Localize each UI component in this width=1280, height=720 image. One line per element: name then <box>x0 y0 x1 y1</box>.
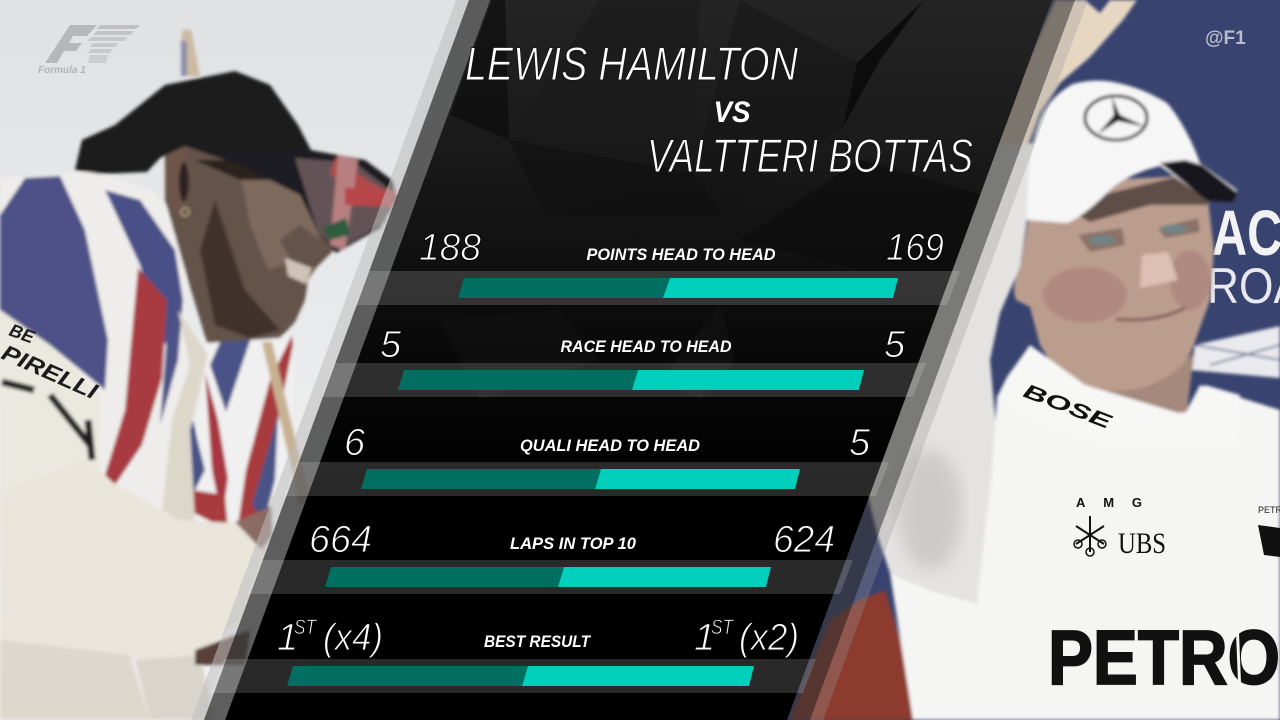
text: background banner <box>1207 197 1280 314</box>
photo: Lewis Hamilton <box>0 0 640 720</box>
stat row: quali head to head: 6 <box>344 422 366 464</box>
stat row: points head to head: 169 <box>886 227 944 269</box>
cap <box>1027 81 1237 223</box>
text: @F1 handle: @F1 <box>1205 28 1246 49</box>
title: LEWIS HAMILTON <box>465 37 798 90</box>
stat row: points head to head: POINTS HEAD TO HEAD <box>586 245 776 264</box>
text: suit sponsor patches <box>0 320 102 404</box>
stat row: best result: BEST RESULT <box>484 632 591 651</box>
drape and torso <box>0 172 188 540</box>
text: race suit logos: BOSE <box>1020 380 1115 434</box>
stat row: points head to head: 188 <box>419 227 481 269</box>
stat row: race head to head: 5 <box>884 324 906 366</box>
stat row: points head to head <box>355 227 960 305</box>
panel strips <box>191 0 1088 720</box>
text: race suit logos: AMG <box>1076 495 1142 510</box>
face <box>165 140 334 343</box>
raised arm <box>990 0 1137 148</box>
text: suit sponsor patches: BE <box>7 320 38 348</box>
title: VS <box>714 96 750 129</box>
stat row: laps in top 10: 664 <box>309 519 372 561</box>
icon: Formula 1 logo <box>38 25 140 76</box>
text: suit sponsor patches: PIRELLI <box>0 340 102 404</box>
stat row: race head to head: RACE HEAD TO HEAD <box>560 337 732 356</box>
icon: Formula 1 logo: Formula 1 <box>38 65 86 76</box>
sleeve shading <box>898 450 962 570</box>
stat row: best result: ST <box>711 616 735 639</box>
text: race suit logos <box>1020 380 1280 701</box>
stat row: race head to head: 5 <box>380 324 402 366</box>
stat row: quali head to head: QUALI HEAD TO HEAD <box>520 436 700 455</box>
stat row: quali head to head <box>284 422 889 496</box>
title <box>465 37 973 182</box>
body <box>890 377 1280 720</box>
stat row: laps in top 10: LAPS IN TOP 10 <box>510 534 637 553</box>
stat row: laps in top 10: 624 <box>773 519 835 561</box>
stat row: best result: (x4) <box>323 617 383 659</box>
face <box>1014 175 1214 395</box>
title: VALTTERI BOTTAS <box>647 129 973 182</box>
text: race suit logos: UBS <box>1118 527 1166 560</box>
stat row: best result: 1 <box>694 617 715 659</box>
sleeve <box>850 143 1035 603</box>
stat row: best result: (x2) <box>739 617 799 659</box>
panel: dark stats panel <box>225 0 1052 720</box>
stat row: laps in top 10 <box>248 519 853 594</box>
stat row: race head to head <box>321 324 926 397</box>
flag held behind <box>190 335 295 530</box>
stat row: best result: ST <box>294 616 318 639</box>
stat row: quali head to head: 5 <box>849 422 871 464</box>
collar <box>1000 345 1240 450</box>
stat row: best result <box>211 616 816 693</box>
photo: Valtteri Bottas <box>640 0 1280 720</box>
hat <box>75 71 312 174</box>
stat row: best result: 1 <box>277 617 298 659</box>
